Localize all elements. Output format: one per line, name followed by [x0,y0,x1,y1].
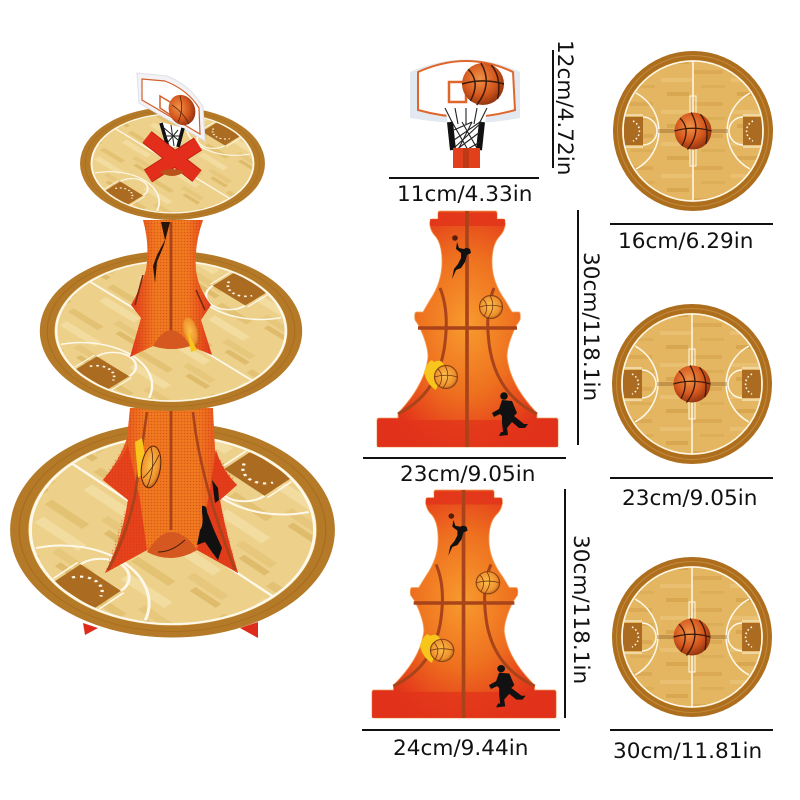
flat piece: upper column [377,211,558,447]
stand: basketball hoop topper [137,73,205,176]
dimension: hoop height: 12cm/4.72in [552,40,577,175]
dimension: lower column width: 24cm/9.44in [393,736,528,761]
flat court: medium [612,304,772,464]
dimension: lower column height: 30cm/118.1in [568,535,593,684]
stand: middle tier court [0,218,357,444]
dimension: upper column width: 23cm/9.05in [400,462,535,487]
stand: top tier court [42,84,303,243]
dimension: medium court: 23cm/9.05in [622,486,757,511]
flat court: small [613,51,773,211]
dimension: large court: 30cm/11.81in [613,739,762,764]
stand: bottom support feet [83,622,258,638]
dimension: small court: 16cm/6.29in [618,229,753,254]
dimension: upper column height: 30cm/118.1in [578,252,603,401]
flat piece: hoop [410,60,520,168]
flat piece: lower column [372,490,556,718]
stand: upper column [130,220,212,357]
dimension: hoop width: 11cm/4.33in [397,182,532,207]
flat court: large [612,557,772,717]
stand: bottom tier court [0,378,402,682]
stand: lower column [103,408,238,573]
